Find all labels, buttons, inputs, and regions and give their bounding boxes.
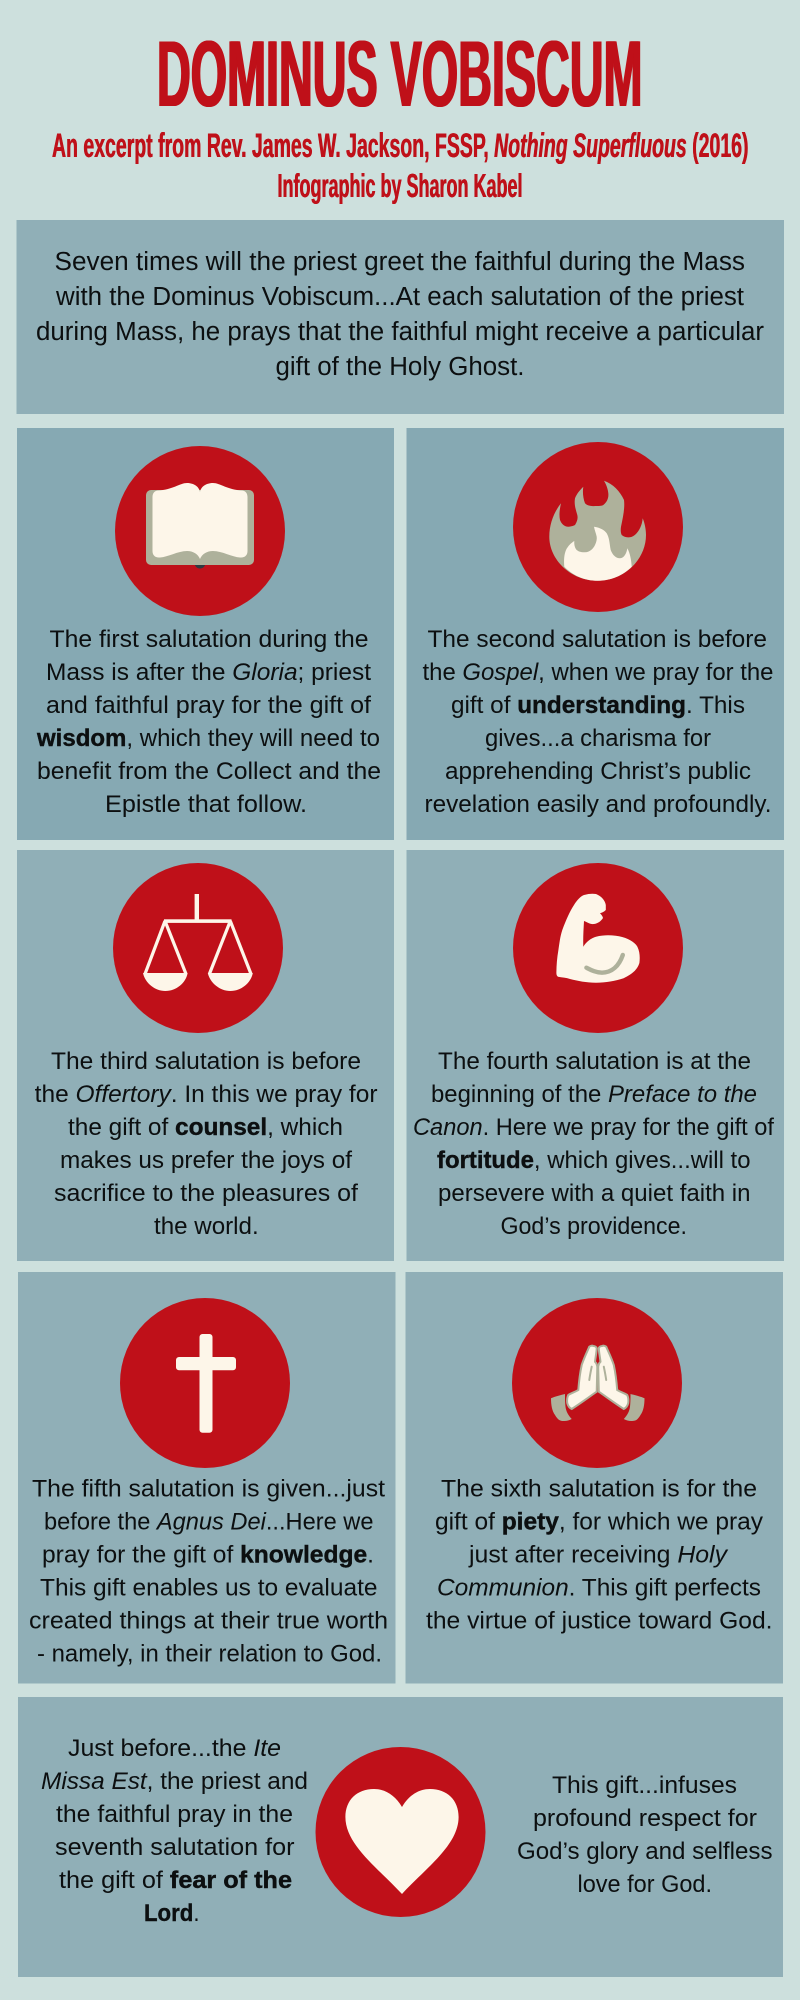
text: sixth salutation: Communion. This gift perfects [437, 1574, 761, 1602]
text: fourth salutation: The fourth salutation is at the [438, 1048, 751, 1075]
text: seventh salutation, right: love for God. [578, 1871, 712, 1898]
icon: flame [513, 442, 683, 612]
text: seventh salutation, left: seventh salutation for [55, 1834, 295, 1861]
panel: fourth salutation, fortitude [406, 850, 784, 1261]
text: fifth salutation: - namely, in their relation to God. [37, 1640, 382, 1668]
text: second salutation: The second salutation is before [428, 626, 767, 653]
text: third salutation: sacrifice to the pleasures of [54, 1180, 358, 1207]
intro text: Seven times will the priest greet the faithful during the Mass [54, 248, 745, 276]
text: first salutation: wisdom, which they will need to [36, 725, 380, 752]
text: second salutation: gift of understanding. This [451, 692, 745, 719]
icon: heart [316, 1747, 486, 1917]
icon: praying hands [512, 1298, 682, 1468]
text: fourth salutation: fortitude, which gives...will to [437, 1147, 750, 1174]
text: third salutation: the world. [154, 1213, 259, 1240]
text: third salutation: the Offertory. In this we pray for [35, 1081, 378, 1108]
text: seventh salutation, right: This gift...infuses [552, 1772, 737, 1799]
text: seventh salutation, right [517, 1772, 772, 1898]
text: fifth salutation: before the Agnus Dei...Here we [44, 1508, 374, 1536]
text: third salutation: makes us prefer the joys of [60, 1147, 352, 1174]
panel: sixth salutation, piety [406, 1272, 783, 1684]
subtitle: credit: Infographic by Sharon Kabel [278, 167, 522, 204]
text: first salutation: Mass is after the Gloria; priest [46, 659, 371, 686]
intro text: during Mass, he prays that the faithful might receive a particular [36, 318, 765, 346]
text: first salutation: benefit from the Collect and the [37, 758, 381, 785]
text: fifth salutation: The fifth salutation is given...just [32, 1476, 385, 1502]
text: first salutation [36, 626, 381, 818]
text: third salutation [35, 1048, 378, 1240]
text: second salutation: revelation easily and profoundly. [424, 791, 772, 818]
text: fourth salutation: God’s providence. [500, 1213, 687, 1240]
panel: seventh salutation, fear of the Lord [18, 1697, 783, 1977]
text: second salutation: the Gospel, when we pray for the [422, 659, 774, 686]
text: first salutation: Epistle that follow. [105, 791, 307, 818]
text: fifth salutation: This gift enables us to evaluate [40, 1574, 378, 1602]
text: fifth salutation [29, 1476, 388, 1668]
text: seventh salutation, left: Just before...the Ite [68, 1735, 281, 1762]
header [52, 21, 748, 204]
panel: fifth salutation, knowledge [18, 1272, 396, 1684]
panel: introduction [16, 220, 784, 414]
text: fifth salutation: created things at their true worth [29, 1608, 388, 1634]
text: second salutation: apprehending Christ’s public [445, 758, 751, 785]
text: fourth salutation: Canon. Here we pray for the gift of [413, 1114, 774, 1141]
text: second salutation [422, 626, 774, 818]
icon: scales [113, 863, 283, 1033]
intro text [36, 248, 765, 381]
intro text: gift of the Holy Ghost. [276, 353, 524, 381]
text: seventh salutation, right: profound respect for [533, 1805, 757, 1832]
icon: open book [115, 446, 285, 616]
text: seventh salutation, left: Lord. [144, 1900, 200, 1927]
text: second salutation: gives...a charisma for [485, 725, 711, 752]
text: sixth salutation: gift of piety, for which we pray [435, 1508, 763, 1536]
text: seventh salutation, left: Missa Est, the priest and [41, 1768, 308, 1795]
panel: second salutation, understanding [406, 428, 784, 840]
text: seventh salutation, right: God’s glory and selfless [517, 1838, 772, 1865]
intro text: with the Dominus Vobiscum...At each salutation of the priest [55, 283, 744, 311]
icon: cross [120, 1298, 290, 1468]
panel: first salutation, wisdom [17, 428, 394, 840]
text: sixth salutation: The sixth salutation is for the [441, 1476, 757, 1502]
text: sixth salutation: the virtue of justice toward God. [426, 1608, 772, 1634]
text: fourth salutation: persevere with a quiet faith in [438, 1180, 750, 1207]
text: seventh salutation, left [41, 1735, 308, 1927]
text: first salutation: and faithful pray for the gift of [46, 692, 371, 719]
text: sixth salutation: just after receiving Holy [468, 1542, 729, 1568]
icon: flexed arm [513, 863, 683, 1033]
text: sixth salutation [426, 1476, 772, 1634]
text: fifth salutation: pray for the gift of knowledge. [42, 1542, 374, 1568]
text: third salutation: the gift of counsel, which [68, 1114, 343, 1141]
text: seventh salutation, left: the gift of fear of the [59, 1867, 292, 1894]
text: third salutation: The third salutation is before [51, 1048, 361, 1075]
text: first salutation: The first salutation during the [50, 626, 368, 653]
text: seventh salutation, left: the faithful pray in the [56, 1801, 293, 1828]
text: fourth salutation: beginning of the Preface to the [431, 1081, 757, 1108]
text: fourth salutation [413, 1048, 774, 1240]
panel: third salutation, counsel [17, 850, 394, 1261]
